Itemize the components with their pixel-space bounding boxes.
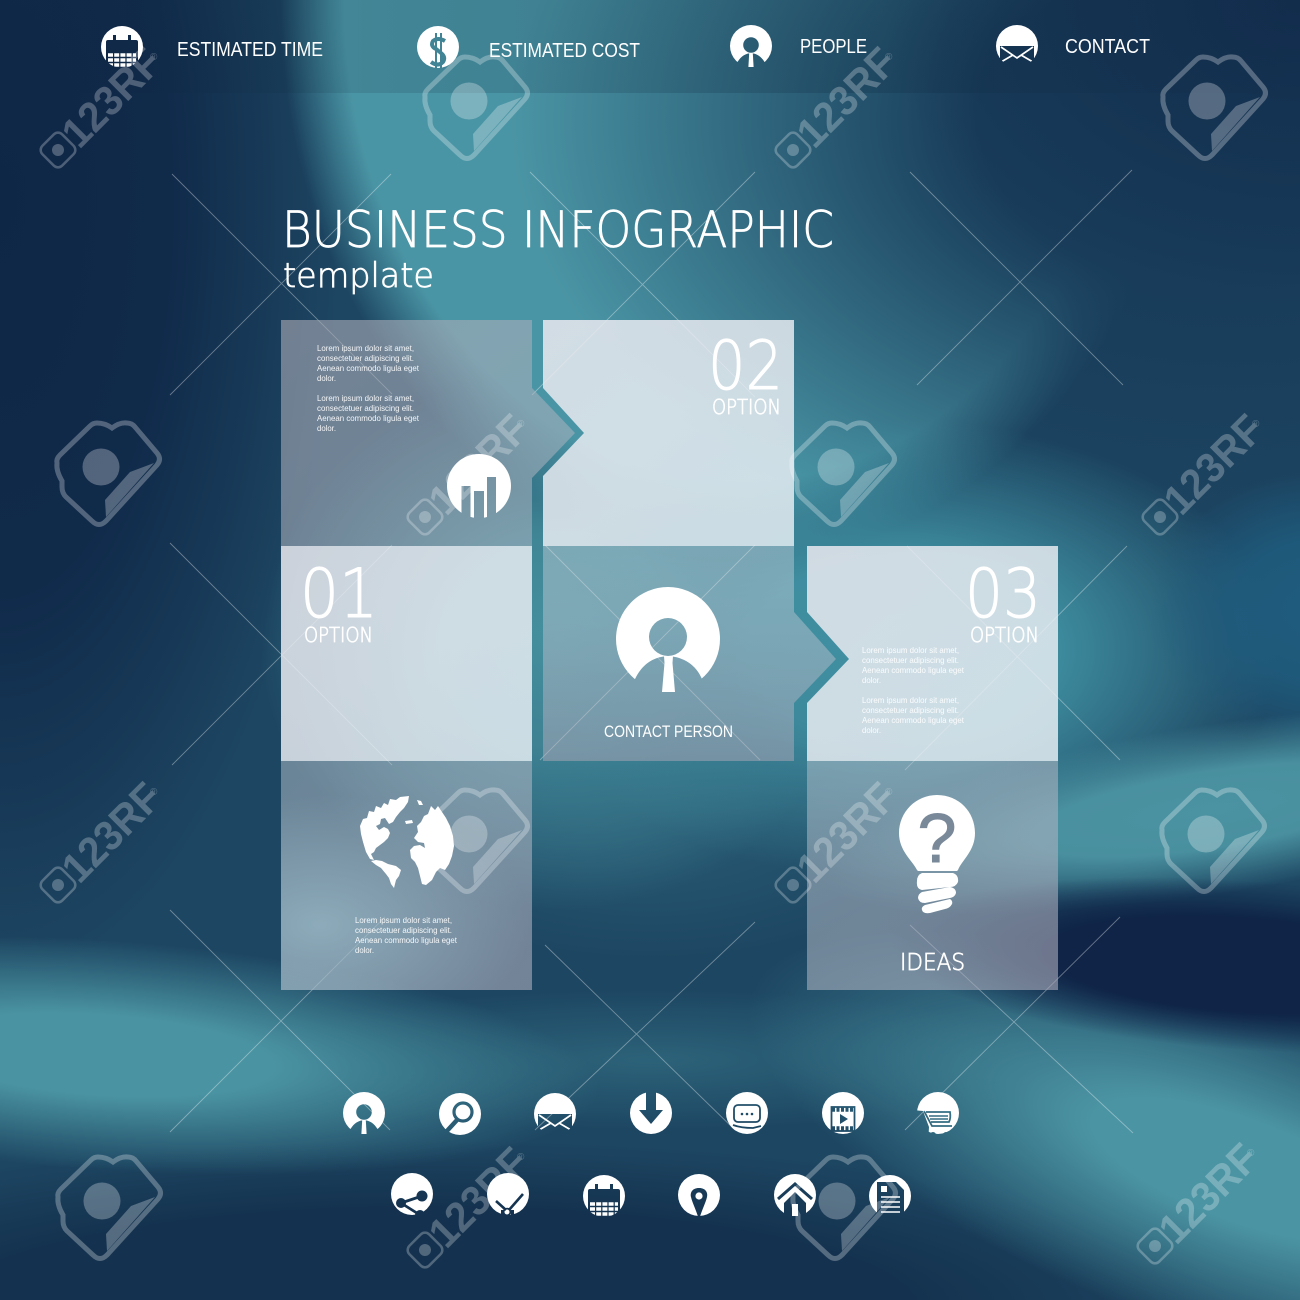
header: estimated time <box>101 26 323 68</box>
watermark wordmarks: 123RF <box>52 773 170 891</box>
label: CONTACT PERSON <box>604 722 733 741</box>
title <box>282 201 834 296</box>
icon: person <box>616 587 720 692</box>
header: estimated cost <box>417 26 640 68</box>
icon: globe <box>360 796 454 888</box>
text block: Aenean commodo ligula eget <box>317 363 420 373</box>
text block <box>317 343 420 433</box>
panel: contact person <box>543 546 836 761</box>
icon: chat <box>726 1092 768 1134</box>
watermark wordmarks: ® <box>150 52 158 63</box>
text block: consectetuer adipiscing elit. <box>862 705 959 715</box>
watermark wordmarks: 123RF <box>787 773 905 891</box>
panel: ideas <box>807 761 1058 990</box>
panel: world <box>281 761 532 990</box>
icon: document <box>869 1175 911 1217</box>
watermark wordmarks: 123RF <box>419 405 537 523</box>
number 02: 02 <box>708 327 783 406</box>
subtitle: template <box>283 256 434 296</box>
panel: option 01 <box>281 546 532 761</box>
watermark wordmarks: ® <box>1247 1148 1255 1159</box>
header: estimated time: ESTIMATED TIME <box>177 39 323 61</box>
icon: map pin <box>678 1174 720 1216</box>
icon: mail <box>534 1093 576 1130</box>
watermark wordmarks: 123RF <box>1149 1134 1267 1252</box>
icon: light bulb: ? <box>918 799 956 877</box>
text block <box>355 915 458 955</box>
icon: home <box>774 1174 816 1216</box>
text block: consectetuer adipiscing elit. <box>317 403 414 413</box>
icon: film <box>822 1092 864 1134</box>
text block: Aenean commodo ligula eget <box>355 935 458 945</box>
icon: bar chart <box>447 454 511 518</box>
icon row 1 <box>343 1092 959 1135</box>
watermark wordmarks: 123RF <box>419 1138 537 1256</box>
watermark wordmarks: 123RF <box>52 38 170 156</box>
top strip <box>0 0 1300 93</box>
number 03: 03 <box>965 555 1041 634</box>
icon: share <box>391 1173 433 1215</box>
watermark wordmarks: 123RF <box>787 38 905 156</box>
text block: Aenean commodo ligula eget <box>862 665 965 675</box>
text block <box>862 645 965 735</box>
label option: OPTION <box>970 623 1039 647</box>
text block: consectetuer adipiscing elit. <box>317 353 414 363</box>
icon row 2 <box>391 1173 911 1217</box>
thin diagonal lines <box>170 170 1133 1133</box>
icon: cart <box>917 1092 959 1134</box>
icon: calendar <box>583 1175 625 1217</box>
icon: download <box>630 1092 672 1134</box>
panel: option 02 <box>543 320 794 546</box>
text block: Aenean commodo ligula eget <box>862 715 965 725</box>
text block: consectetuer adipiscing elit. <box>355 925 452 935</box>
title: BUSINESS INFOGRAPHIC <box>282 201 834 259</box>
label option: OPTION <box>712 395 781 419</box>
header: contact: CONTACT <box>1065 36 1150 58</box>
panel: description with chart icon <box>281 320 575 546</box>
text block: dolor. <box>355 945 374 955</box>
text block: Lorem ipsum dolor sit amet, <box>355 915 452 925</box>
header: people: PEOPLE <box>800 36 867 58</box>
watermark wordmarks: ® <box>1252 419 1260 430</box>
text block: dolor. <box>317 423 336 433</box>
icon: tools <box>487 1173 529 1215</box>
panel: option 03 <box>807 546 1058 761</box>
text block: Lorem ipsum dolor sit amet, <box>862 645 959 655</box>
text block: Aenean commodo ligula eget <box>317 413 420 423</box>
text block: dolor. <box>317 373 336 383</box>
watermark wordmarks: ® <box>885 787 893 798</box>
watermark wordmarks: ® <box>517 419 525 430</box>
text block: Lorem ipsum dolor sit amet, <box>317 343 414 353</box>
watermark wordmarks: 123RF <box>1154 405 1272 523</box>
header: estimated cost: ESTIMATED COST <box>489 40 640 62</box>
watermark wordmarks: ® <box>150 787 158 798</box>
number 01: 01 <box>300 555 378 634</box>
text block: dolor. <box>862 675 881 685</box>
icon: light bulb <box>899 795 975 913</box>
text block: consectetuer adipiscing elit. <box>862 655 959 665</box>
text block: Lorem ipsum dolor sit amet, <box>862 695 959 705</box>
header: people <box>730 25 867 67</box>
header: contact <box>996 25 1150 62</box>
watermark wordmarks: ® <box>517 1152 525 1163</box>
label option: OPTION <box>304 623 373 647</box>
icon: search <box>439 1093 481 1135</box>
watermark wordmarks: ® <box>885 52 893 63</box>
text block: dolor. <box>862 725 881 735</box>
label: IDEAS <box>900 950 965 976</box>
text block: Lorem ipsum dolor sit amet, <box>317 393 414 403</box>
icon: person <box>343 1092 385 1134</box>
